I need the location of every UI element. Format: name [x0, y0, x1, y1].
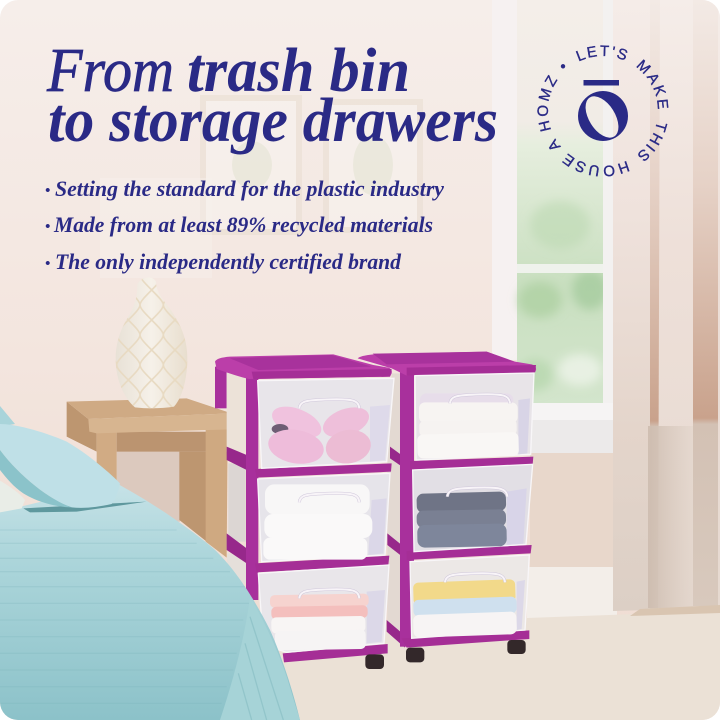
casters	[406, 648, 424, 662]
rails	[255, 463, 392, 478]
icon: logo bar	[584, 80, 619, 86]
title: trash bin	[187, 37, 410, 105]
title: From	[46, 37, 174, 105]
top drawer	[258, 378, 394, 468]
circular slogan: LET'SMAKE THISHOUSEAHOMZ•	[537, 45, 668, 176]
bed with pillows	[0, 406, 300, 720]
bottom drawer	[258, 565, 389, 652]
side table	[67, 398, 232, 558]
lower wall and baseboard	[527, 453, 617, 619]
floor	[280, 611, 720, 720]
wall art: left botanical frame	[203, 98, 299, 232]
lid	[358, 352, 536, 376]
back pillow	[0, 406, 15, 427]
vase	[116, 277, 187, 408]
bullet 3: The only independently certified brand	[55, 249, 402, 274]
storage drawers	[215, 352, 536, 669]
window	[492, 0, 617, 453]
curtain	[613, 0, 720, 616]
bullet 1: Setting the standard for the plastic industry	[55, 176, 445, 201]
wall art: right botanical frame	[326, 102, 420, 230]
bullet list	[45, 176, 445, 274]
top drawer	[415, 373, 534, 460]
side table and vase	[67, 277, 232, 558]
icon: logo o	[578, 91, 628, 141]
caster	[365, 654, 384, 669]
right drawer unit	[358, 352, 536, 662]
circular logo badge	[537, 45, 668, 176]
pillow shadow	[23, 502, 147, 512]
teal pillow	[0, 424, 120, 508]
left drawer unit	[215, 354, 394, 669]
middle drawer	[413, 464, 533, 552]
bullet 1: •	[45, 183, 50, 199]
blurred lamp shade	[100, 178, 212, 278]
floral pillow	[0, 481, 25, 512]
middle drawer	[258, 473, 390, 562]
title: to storage drawers	[48, 87, 498, 155]
bottom drawer	[410, 555, 529, 638]
bullet 3: •	[45, 256, 50, 272]
bed cover	[0, 483, 300, 720]
rails	[410, 457, 533, 470]
bullet 2: •	[45, 219, 50, 235]
lid	[215, 354, 392, 379]
bullet 2: Made from at least 89% recycled materials	[53, 212, 433, 237]
title	[46, 37, 498, 155]
